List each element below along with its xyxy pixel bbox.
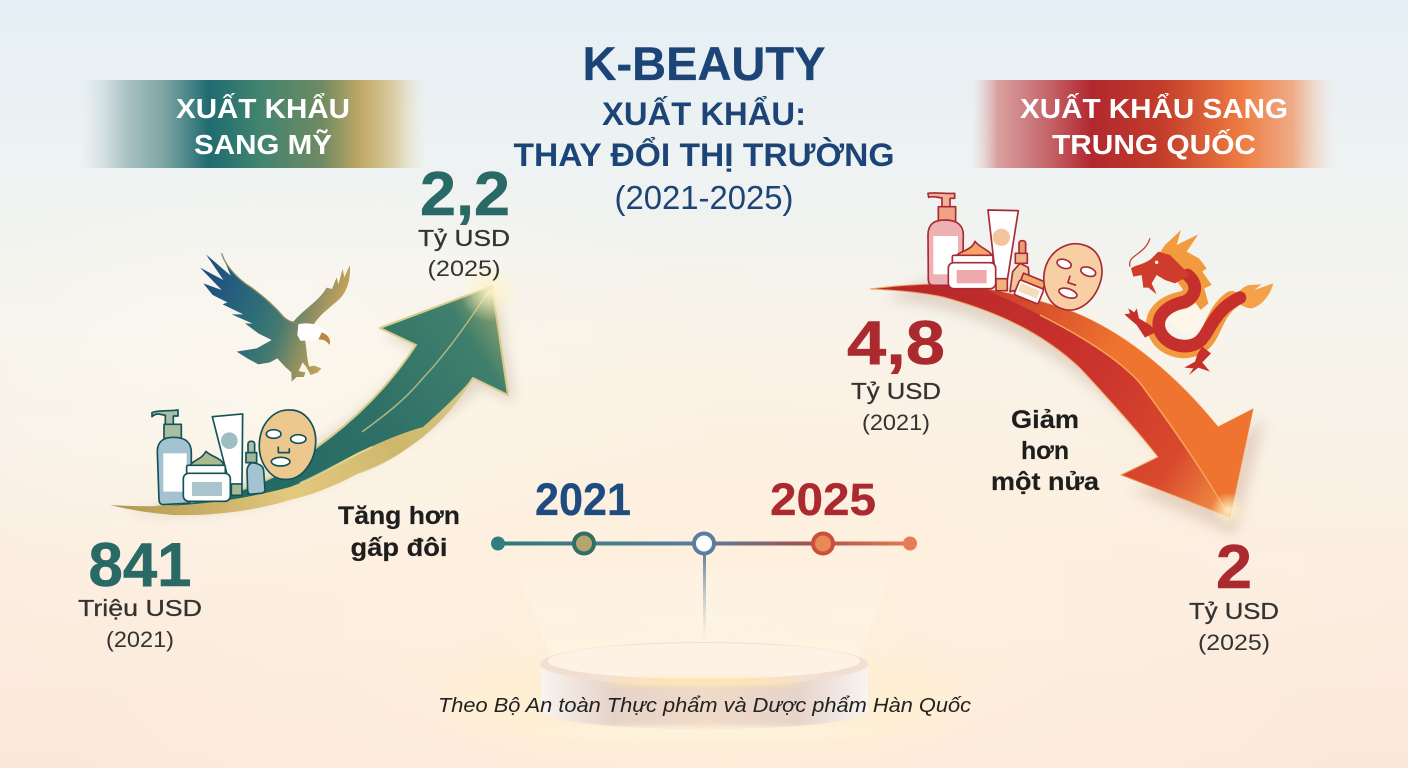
- chart: falling red arrow: [870, 280, 1265, 535]
- callout: growth: Tăng hơn: [338, 502, 460, 530]
- year label 2025: 2025: [770, 474, 876, 525]
- title: XUẤT KHẨU:: [602, 96, 806, 132]
- stat: 841 Triệu USD: Triệu USD: [78, 595, 202, 621]
- timeline marker 2025: [813, 534, 833, 554]
- dropper: [1010, 241, 1030, 292]
- callout: decline: [991, 406, 1100, 496]
- icon: eagle: [200, 253, 350, 382]
- callout: growth: [338, 502, 460, 562]
- stat: 841 Triệu USD: [78, 531, 202, 652]
- icon: dragon: [1124, 230, 1273, 375]
- stat: 4,8 Tỷ USD: (2021): [862, 410, 930, 435]
- stat: 2 Tỷ USD: Tỷ USD: [1189, 598, 1279, 624]
- icon: cosmetics group (green): [152, 410, 316, 505]
- face mask: [1035, 236, 1110, 318]
- timeline end dot right: [903, 536, 917, 550]
- stat: 841 Triệu USD: (2021): [106, 627, 174, 652]
- callout: decline: Giảm: [1011, 406, 1079, 434]
- title: (2021-2025): [614, 179, 794, 216]
- stat: 2,2 Tỷ USD: [418, 160, 510, 281]
- tube: [212, 414, 243, 495]
- jar: [948, 241, 996, 289]
- panel: China export banner: TRUNG QUỐC: [1052, 128, 1256, 160]
- panel: US export banner: SANG MỸ: [194, 129, 332, 160]
- stat: 2,2 Tỷ USD: 2,2: [420, 160, 510, 229]
- year label 2021: 2021: [535, 474, 631, 525]
- tube: [988, 210, 1018, 291]
- jar: [183, 451, 230, 501]
- timeline end dot left: [491, 536, 505, 550]
- dropper: [246, 441, 265, 494]
- pump bottle: [928, 193, 963, 285]
- title: K-BEAUTY: [582, 37, 826, 90]
- stat: 2 Tỷ USD: (2025): [1198, 630, 1270, 655]
- panel: US export banner: [82, 80, 425, 168]
- callout: decline: một nửa: [991, 468, 1100, 496]
- stat: 2 Tỷ USD: [1189, 533, 1279, 655]
- callout: decline: hơn: [1021, 437, 1069, 465]
- title: THAY ĐỔI THỊ TRƯỜNG: [514, 137, 894, 173]
- timeline: [491, 534, 917, 643]
- stat: 2 Tỷ USD: 2: [1216, 533, 1252, 602]
- face mask: [259, 410, 316, 479]
- chart: rising green arrow: [110, 262, 520, 515]
- timeline marker center: [694, 534, 714, 554]
- stat: 841 Triệu USD: 841: [88, 531, 192, 600]
- stat: 2,2 Tỷ USD: Tỷ USD: [418, 225, 510, 251]
- callout: growth: gấp đôi: [350, 534, 448, 562]
- title: [514, 37, 894, 216]
- panel: China export banner: [972, 80, 1335, 168]
- stat: 4,8 Tỷ USD: [847, 309, 945, 435]
- icon: cosmetics group (red): [928, 193, 1110, 318]
- source note: Theo Bộ An toàn Thực phẩm và Dược phẩm Hàn Quốc: [438, 695, 971, 717]
- timeline marker 2021: [574, 534, 594, 554]
- stat: 4,8 Tỷ USD: 4,8: [847, 309, 945, 378]
- pump bottle: [152, 410, 191, 505]
- panel: China export banner: XUẤT KHẨU SANG: [1020, 93, 1288, 124]
- small jar: [1014, 273, 1047, 304]
- stat: 2,2 Tỷ USD: (2025): [428, 256, 500, 281]
- stat: 4,8 Tỷ USD: Tỷ USD: [851, 378, 941, 404]
- panel: US export banner: XUẤT KHẨU: [176, 93, 350, 124]
- podium: [444, 562, 964, 755]
